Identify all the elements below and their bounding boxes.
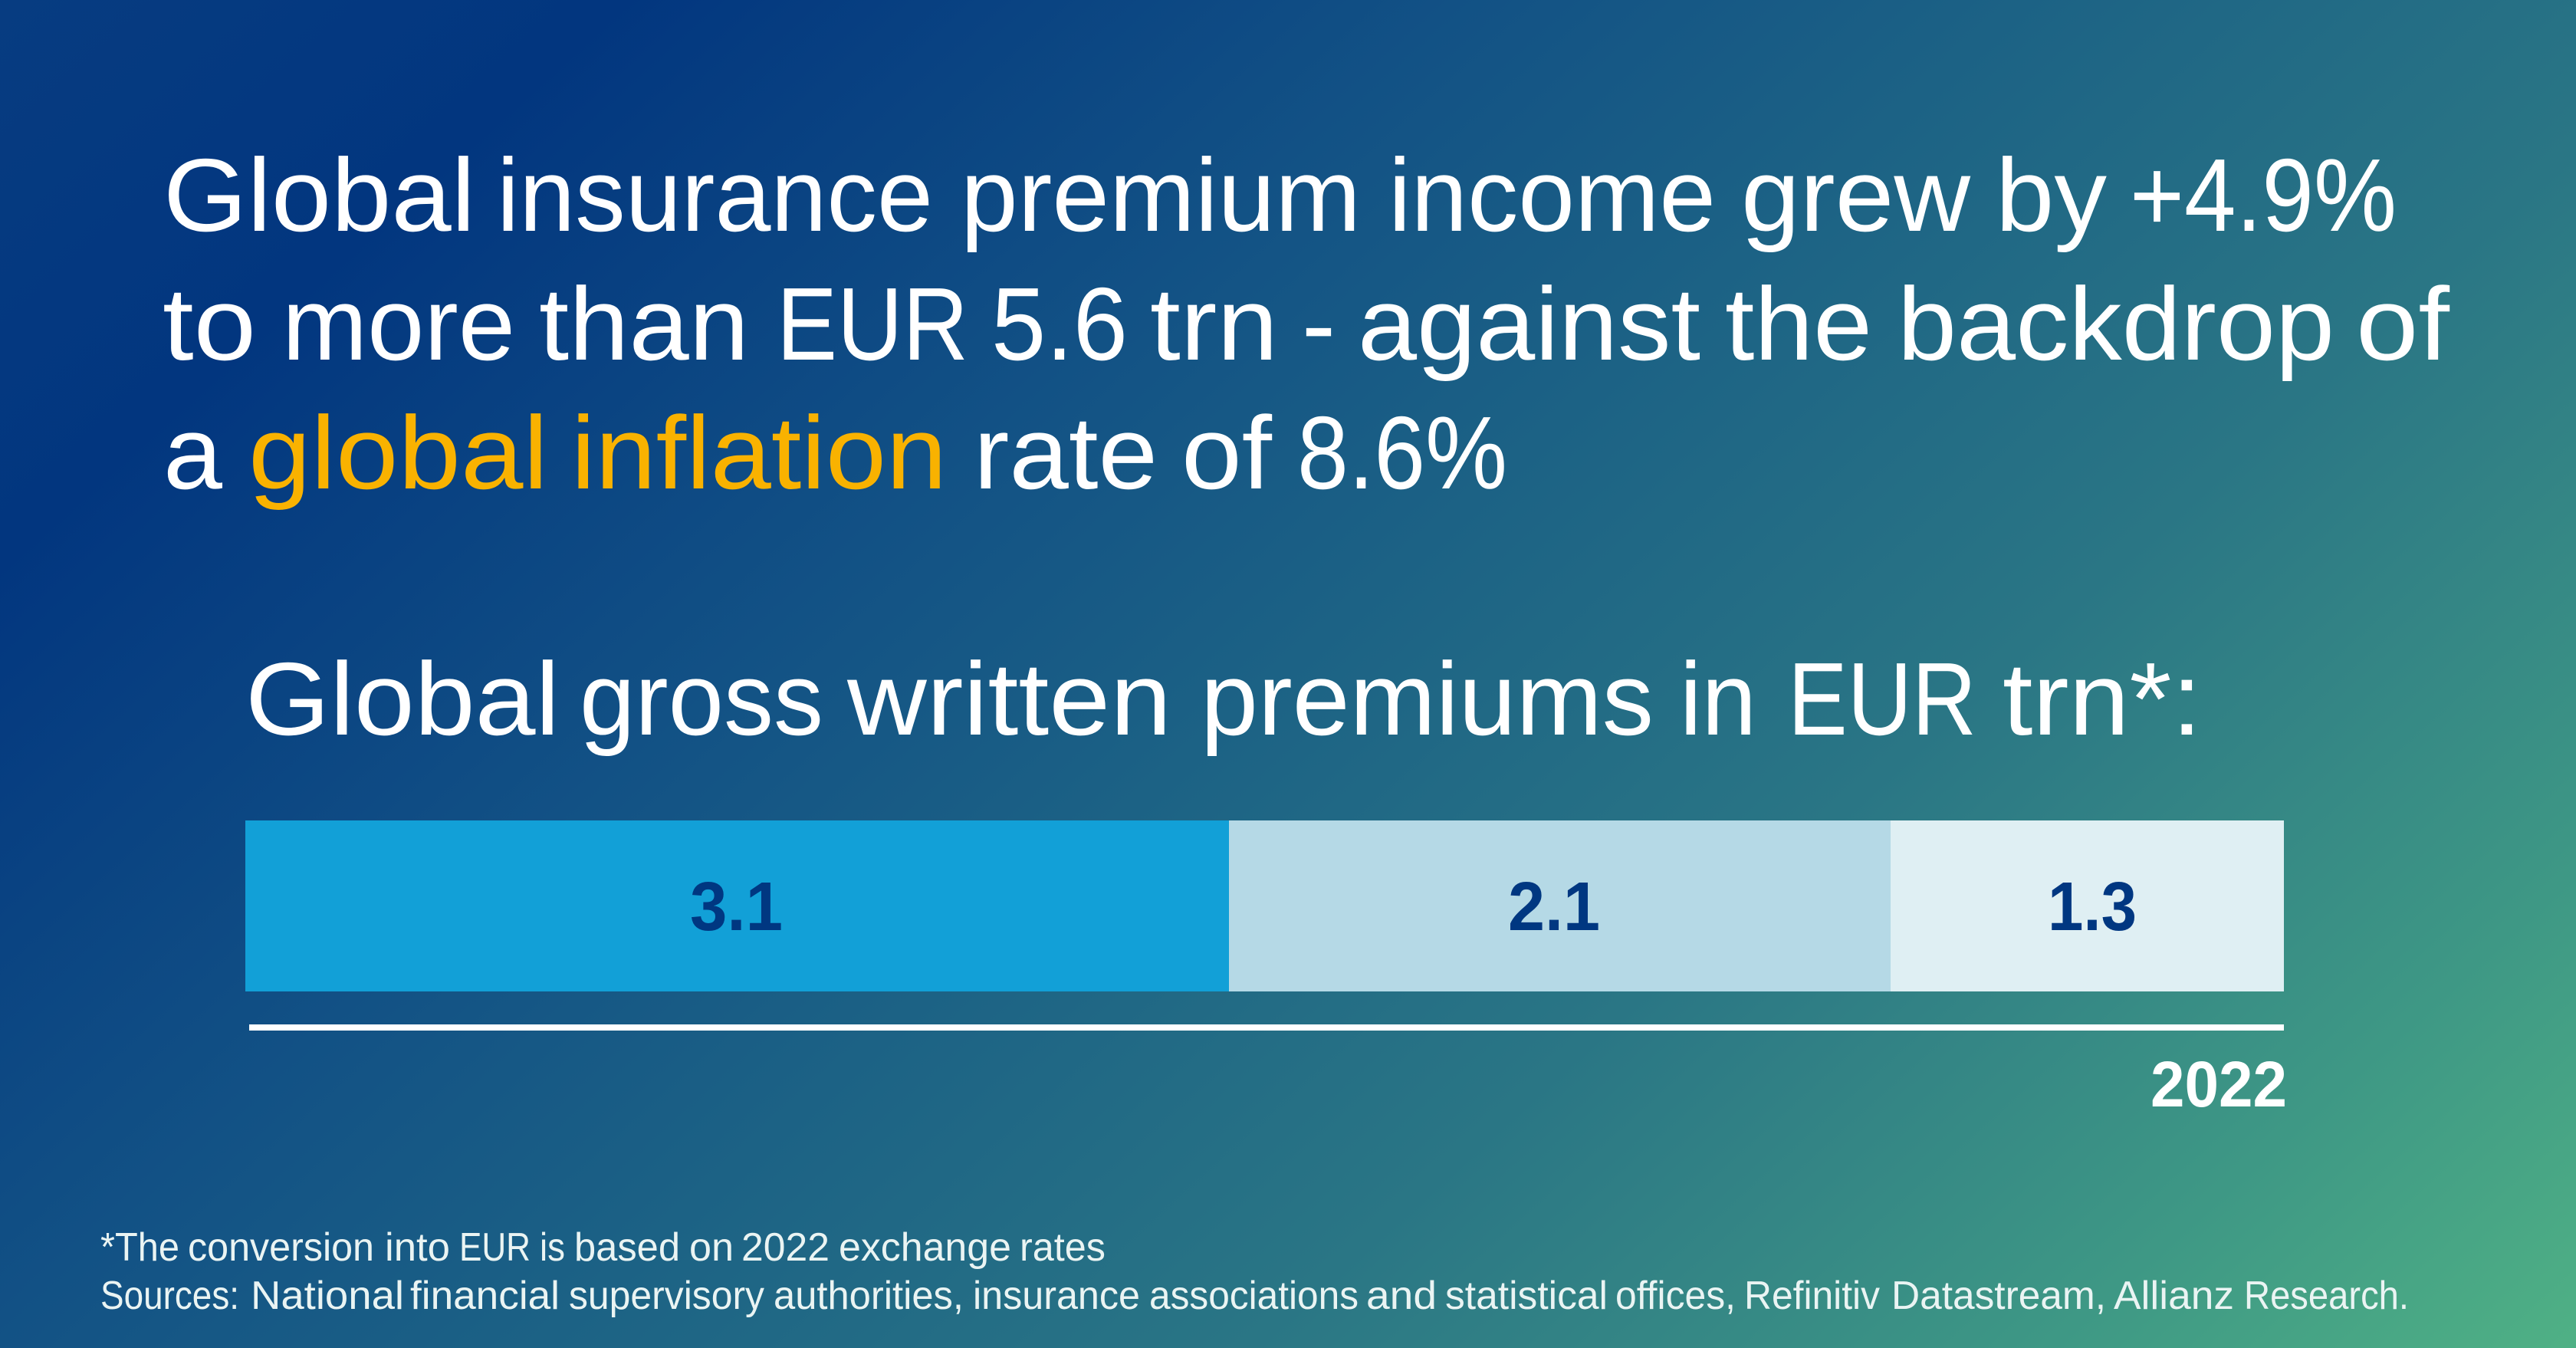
title — [163, 137, 2450, 511]
footnote and sources — [100, 1225, 2409, 1318]
title: by — [1996, 137, 2107, 253]
chart heading: trn*: — [2003, 641, 2202, 757]
stacked bar chart — [245, 820, 2287, 1120]
segment: 3.1: 3.1 — [690, 869, 783, 945]
footnote and sources: Refinitiv — [1744, 1274, 1880, 1318]
footnote and sources: rates — [1020, 1225, 1106, 1270]
footnote and sources: into — [385, 1225, 450, 1270]
segment: 2.1: 2.1 — [1508, 869, 1600, 945]
footnote and sources: statistical — [1445, 1274, 1608, 1318]
footnote and sources: authorities, — [774, 1274, 964, 1318]
axis line — [249, 1024, 2284, 1031]
title: the — [1725, 266, 1872, 382]
footnote and sources: Sources: — [100, 1274, 239, 1318]
footnote and sources: insurance — [973, 1274, 1140, 1318]
chart heading: gross — [580, 641, 823, 757]
title: of — [1181, 395, 1273, 511]
title: insurance — [497, 137, 933, 253]
footnote and sources: Allianz — [2114, 1274, 2234, 1318]
footnote and sources: exchange — [839, 1225, 1011, 1270]
segment: 2.1 — [1229, 820, 1891, 991]
footnote and sources: associations — [1149, 1274, 1359, 1318]
title: of — [2356, 266, 2450, 382]
chart heading: premiums — [1201, 641, 1654, 757]
chart heading — [245, 641, 2202, 757]
title: EUR — [777, 266, 968, 382]
footnote and sources: supervisory — [569, 1274, 764, 1318]
title: global — [248, 395, 548, 511]
footnote and sources: EUR — [459, 1225, 531, 1270]
title: than — [539, 266, 749, 382]
footnote and sources: National — [251, 1274, 404, 1318]
footnote and sources: on — [689, 1225, 734, 1270]
segment: 1.3: 1.3 — [2048, 869, 2137, 945]
title: trn — [1150, 266, 1278, 382]
footnote and sources: Research. — [2244, 1274, 2409, 1318]
title: against — [1358, 266, 1700, 382]
title: backdrop — [1898, 266, 2334, 382]
title: Global — [163, 137, 475, 253]
footnote and sources: is — [540, 1225, 565, 1270]
footnote and sources: and — [1366, 1274, 1437, 1318]
title: +4.9% — [2130, 137, 2397, 253]
chart heading: in — [1680, 641, 1756, 757]
title: more — [282, 266, 515, 382]
title: grew — [1741, 137, 1971, 253]
title: income — [1388, 137, 1716, 253]
segment: 1.3 — [1891, 820, 2284, 991]
footnote and sources: *The — [100, 1225, 179, 1270]
title: 8.6% — [1297, 395, 1507, 511]
title: rate — [974, 395, 1158, 511]
footnote and sources: based — [574, 1225, 680, 1270]
axis label: 2022: 2022 — [2150, 1048, 2287, 1120]
footnote and sources: 2022 — [741, 1225, 830, 1270]
footnote and sources: offices, — [1615, 1274, 1736, 1318]
title: 5.6 — [991, 266, 1128, 382]
footnote and sources: conversion — [188, 1225, 374, 1270]
segment: 3.1 — [245, 820, 1229, 991]
chart heading: Global — [245, 641, 560, 757]
title: to — [163, 266, 256, 382]
title: - — [1302, 266, 1336, 382]
footnote and sources: Datastream, — [1891, 1274, 2106, 1318]
chart heading: written — [846, 641, 1171, 757]
title: premium — [961, 137, 1361, 253]
title: inflation — [571, 395, 947, 511]
chart heading: EUR — [1788, 641, 1976, 757]
title: a — [163, 395, 223, 511]
footnote and sources: financial — [410, 1274, 560, 1318]
